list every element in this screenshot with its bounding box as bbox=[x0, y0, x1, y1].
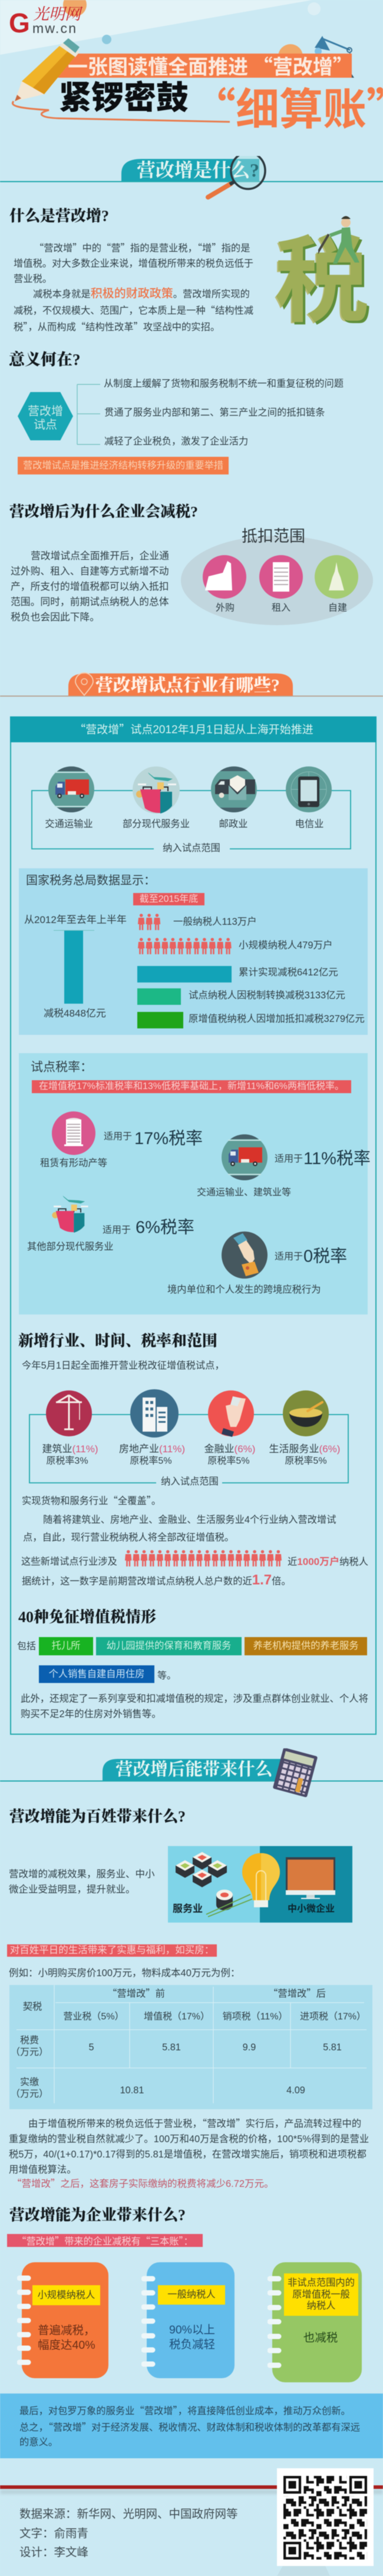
data heading: 国家税务总局数据显示： bbox=[26, 874, 156, 887]
involves label: 这些新增试点行业涉及 bbox=[21, 1556, 117, 1567]
panel header text: “营改增”试点2012年1月1日起从上海开始推进 bbox=[74, 721, 313, 737]
paragraph 1: “营改增”中的“营”指的是营业税，“增”指的是 bbox=[34, 240, 250, 254]
label: telecom: 电信业 bbox=[295, 819, 323, 829]
result: 税负减轻 bbox=[169, 2338, 215, 2351]
icon: big tax character: 税 bbox=[275, 228, 369, 334]
credits bbox=[19, 2505, 238, 2562]
industry frame and icons bbox=[31, 766, 352, 850]
original rate 4: 原税率5% bbox=[285, 1456, 327, 1466]
heading: 40种免征增值税情形 bbox=[18, 1608, 156, 1625]
paragraph 2 bbox=[14, 287, 253, 333]
label: 小规模纳税人 bbox=[38, 2290, 95, 2301]
row tax fee bbox=[11, 2035, 48, 2059]
table: tax comparison bbox=[9, 1985, 372, 2109]
credits: 设计：李文峰 bbox=[19, 2546, 88, 2559]
result bbox=[169, 2323, 215, 2352]
caption 17: 租赁有形动产等 bbox=[40, 1158, 107, 1169]
heading: 营改增后为什么企业会减税? bbox=[9, 503, 198, 520]
rate 17: 17%税率 bbox=[134, 1130, 203, 1148]
QR pattern bbox=[283, 2476, 367, 2560]
conclusion text: 的意义。 bbox=[19, 2437, 58, 2448]
tag elderly care bbox=[245, 1637, 367, 1655]
title line two black: 紧锣密鼓 bbox=[59, 79, 189, 116]
people row bbox=[124, 1549, 282, 1567]
tag self-built housing bbox=[39, 1665, 154, 1683]
explanation paragraph: 重复缴纳的营业税自然就减少了。100万和40万是含税的价格，100*5%得到的是营业 bbox=[9, 2134, 369, 2145]
bar original bbox=[137, 1012, 183, 1028]
value pilot: 试点纳税人因税制转换减税3133亿元 bbox=[189, 990, 345, 1001]
paragraph 1: 增值税。对大多数企业来说，增值税所带来的税负远低于 bbox=[14, 258, 253, 269]
hexagon: pilot bbox=[18, 392, 73, 440]
column group before: “营增改”前 bbox=[107, 1986, 165, 2000]
applies to: 适用于 bbox=[103, 1225, 131, 1235]
pill and divider bbox=[0, 1758, 383, 1782]
chart: deduction scope bbox=[181, 536, 373, 625]
heading: 营改增能为百姓带来什么? bbox=[9, 1808, 186, 1825]
original rate 1: 原税率3% bbox=[46, 1456, 88, 1466]
illustration: services and small business bbox=[168, 1846, 352, 1923]
value 5: 5 bbox=[88, 2042, 94, 2053]
label: self build: 自建 bbox=[328, 603, 347, 613]
icon: calculator bbox=[268, 1748, 324, 1798]
hexagon label: 试点 bbox=[34, 419, 57, 431]
block: benefits for people bbox=[0, 1804, 383, 1958]
title line one: 一张图读懂全面推进 “营改增” bbox=[68, 51, 353, 80]
icon: truck bbox=[222, 1134, 268, 1181]
row tax fee: 税费 bbox=[20, 2036, 39, 2046]
column input tax: 进项税（17%） bbox=[300, 2011, 366, 2021]
note bbox=[21, 1693, 368, 1719]
note: 购买不足2年的住房对外销售等。 bbox=[21, 1709, 161, 1719]
conclusion text: 总之，“营改增”对于经济发展、税收情况、财政体制和税收体制的改革都有深远 bbox=[19, 2419, 360, 2434]
value original: 原增值税纳税人因增加抵扣减税3279亿元 bbox=[189, 1014, 365, 1024]
label real estate: 房地产业(11%) bbox=[119, 1443, 185, 1455]
column VAT: 增值税（17%） bbox=[144, 2011, 210, 2021]
paragraph 1 bbox=[14, 240, 253, 284]
column output tax: 销项税（11%） bbox=[223, 2011, 288, 2021]
label bbox=[32, 2285, 100, 2305]
row actual paid: （万元） bbox=[11, 2089, 48, 2099]
callout: 对百姓平日的生活带来了实惠与福利，如买房： bbox=[10, 1945, 214, 1956]
rate 0: 0税率 bbox=[303, 1247, 347, 1266]
result: 也减税 bbox=[303, 2331, 338, 2344]
block: why taxes fall bbox=[9, 503, 373, 625]
notebook body and rings bbox=[141, 2262, 235, 2378]
callout: “营改增”带来的企业减税有“三本账”： bbox=[16, 2233, 193, 2248]
rate 11: 11%税率 bbox=[303, 1150, 371, 1169]
icon: luggage bbox=[52, 1196, 88, 1233]
label services: 服务业 bbox=[173, 1903, 203, 1914]
label bbox=[158, 2285, 225, 2305]
block: significance bbox=[9, 350, 344, 475]
label: purchase: 外购 bbox=[216, 603, 235, 613]
period label: 从2012年至去年上半年 bbox=[24, 914, 127, 925]
paragraph: 产，所支付的增值税都可以纳入抵扣 bbox=[11, 581, 169, 592]
vertical bar bbox=[53, 930, 94, 1004]
logo: domain: mw.cn bbox=[32, 21, 77, 36]
frame caption: 纳入试点范围 bbox=[161, 1476, 219, 1487]
notebook: small taxpayers bbox=[17, 2262, 108, 2378]
paragraph 2: 减税，不仅规模大、范围广，它本质上是一种“结构性减 bbox=[14, 303, 253, 317]
value 5.81: 5.81 bbox=[162, 2042, 181, 2053]
conclusion text: 最后，对包罗万象的服务业“营改增”，将直接降低创业成本，推动万众创新。 bbox=[19, 2403, 351, 2417]
heading: 营改增能为企业带来什么? bbox=[9, 2206, 186, 2223]
footer divider bbox=[0, 2485, 383, 2489]
coverage paragraph line 1: 随着将建筑业、房地产业、金融业、生活服务业4个行业纳入营改增试 bbox=[43, 1515, 336, 1525]
benefit 1: 从制度上缓解了货物和服务税制不统一和重复征税的问题 bbox=[104, 379, 344, 389]
panel header bbox=[10, 716, 377, 742]
paragraph: 微企业受益明显，提升就业。 bbox=[9, 1884, 136, 1895]
logo: site name: 光明网 bbox=[33, 5, 81, 23]
cell: deed tax: 契税 bbox=[23, 2001, 42, 2012]
explanation paragraph: 税5万，40/(1+0.17)*0.17得到的5.81是增值税，在营改增实施后，销项税和进项税都 bbox=[9, 2149, 367, 2160]
notebook body and rings bbox=[17, 2262, 108, 2378]
header: title banner and logo bbox=[9, 0, 383, 138]
hexagon label: 营改增 bbox=[28, 405, 63, 418]
result: 90%以上 bbox=[169, 2323, 215, 2336]
pilot industries row bbox=[31, 766, 352, 854]
paragraph 1: 营业税。 bbox=[14, 274, 52, 284]
block: what is yingaizeng bbox=[9, 207, 370, 334]
original rate 3: 原税率5% bbox=[207, 1456, 250, 1466]
paragraph: 营改增的减税效果，服务业、中小 bbox=[9, 1869, 154, 1880]
paragraph bbox=[11, 550, 169, 623]
credits: 数据来源：新华网、光明网、中国政府网等 bbox=[19, 2508, 238, 2521]
panel: tax administration data bbox=[19, 868, 368, 1035]
label bbox=[284, 2273, 358, 2316]
original rate 2: 原税率5% bbox=[130, 1456, 172, 1466]
notebook body and rings bbox=[268, 2262, 362, 2382]
result note: “营增改”之后，这套房子实际缴纳的税费将减少6.72万元。 bbox=[12, 2176, 274, 2190]
notebook: non-pilot VAT payers bbox=[268, 2262, 362, 2382]
paragraph: 范围。同时，前期试点纳税人的总体 bbox=[11, 596, 169, 608]
heading text: 营改增后能带来什么 bbox=[115, 1760, 272, 1779]
rates strip: 在增值税17%标准税率和13%低税率基础上，新增11%和6%两档低税率。 bbox=[39, 1081, 344, 1091]
row actual paid bbox=[11, 2077, 48, 2100]
tree connector bbox=[77, 384, 100, 445]
callout bbox=[18, 457, 229, 474]
paragraph: 过外购、租入、自建等方式新增不动 bbox=[11, 566, 169, 577]
paragraph 2: 减税本身就是积极的财政政策。营改增所实现的 bbox=[33, 287, 250, 300]
value total: 累计实现减税6412亿元 bbox=[239, 967, 338, 978]
caption 6: 其他部分现代服务业 bbox=[27, 1241, 114, 1252]
label: 一般纳税人 bbox=[167, 2289, 216, 2300]
people row 2 bbox=[137, 937, 232, 955]
section heading text: 营改增是什么? bbox=[137, 160, 259, 181]
explanation paragraph bbox=[9, 2115, 369, 2177]
label: rent: 租入 bbox=[272, 603, 290, 613]
benefit 3: 减轻了企业税负，激发了企业活力 bbox=[104, 436, 248, 447]
label: 原增值税一般 bbox=[292, 2289, 350, 2299]
tag kindergarten: 幼儿园提供的保育和教育服务 bbox=[107, 1641, 231, 1651]
label finance: 金融业(6%) bbox=[204, 1443, 255, 1455]
logo: G mark: G bbox=[9, 8, 30, 38]
icon: man with mower bbox=[318, 215, 359, 264]
block: benefits for enterprises bbox=[0, 2205, 383, 2384]
tag nursery: 托儿所 bbox=[52, 1641, 80, 1651]
explanation paragraph: 用增值税算法。 bbox=[9, 2165, 77, 2175]
table grid bbox=[9, 1985, 372, 2109]
conclusion text bbox=[19, 2403, 360, 2450]
heading text: 营改增试点行业有哪些? bbox=[95, 676, 280, 695]
header artwork: circles, lamp, banner, pencil bbox=[11, 0, 355, 124]
panel: pilot programme bbox=[10, 716, 377, 1735]
icon: building bbox=[51, 1111, 96, 1156]
date tag: 截至2015年底 bbox=[140, 894, 198, 904]
caption 11: 交通运输业、建筑业等 bbox=[197, 1187, 291, 1197]
value 4.09: 4.09 bbox=[286, 2085, 305, 2096]
benefit 2: 贯通了服务业内部和第二、第三产业之间的抵扣链条 bbox=[104, 407, 325, 418]
row tax fee: （万元） bbox=[11, 2047, 48, 2057]
tag kindergarten bbox=[96, 1637, 242, 1655]
result: 幅度达40% bbox=[38, 2339, 95, 2352]
label: modern services: 部分现代服务业 bbox=[123, 819, 190, 829]
label: transport: 交通运输业 bbox=[45, 819, 93, 829]
caption 0: 境内单位和个人发生的跨境应税行为 bbox=[167, 1284, 321, 1295]
rate 6: 6%税率 bbox=[136, 1219, 194, 1237]
bar total bbox=[137, 966, 232, 982]
value 9.9: 9.9 bbox=[243, 2042, 256, 2053]
example intro: 例如：小明购买房价100万元，物料成本40万元为例： bbox=[9, 1968, 240, 1979]
label construction: 建筑业(11%) bbox=[42, 1443, 98, 1455]
icon: hand and card bbox=[221, 1231, 268, 1279]
note: 此外，还规定了一系列享受和扣减增值税的规定，涉及重点群体创业就业、个人将 bbox=[21, 1694, 368, 1704]
ratio line: 据统计，这一数字是前期营改增试点纳税人总户数的近1.7倍。 bbox=[22, 1572, 291, 1588]
paragraph: 营改增试点全面推开后，企业通 bbox=[31, 550, 169, 562]
value 5.81: 5.81 bbox=[323, 2042, 342, 2053]
section heading: pilot industries bbox=[0, 672, 383, 697]
label: 非试点范围内的 bbox=[288, 2278, 355, 2288]
new industries frame and icons bbox=[28, 1389, 349, 1484]
label: postal: 邮政业 bbox=[219, 819, 247, 829]
label small business: 中小微企业 bbox=[288, 1904, 335, 1914]
column business tax: 营业税（5%） bbox=[63, 2011, 124, 2021]
paragraph 2: 税”，从而构成“结构性改革”攻坚战中的实招。 bbox=[14, 319, 220, 333]
label: 纳税人 bbox=[307, 2301, 335, 2311]
callout: 营改增试点是推进经济结构转移升级的重要举措 bbox=[23, 460, 223, 471]
result bbox=[38, 2323, 95, 2353]
hexagon label bbox=[28, 404, 63, 431]
applies to: 适用于 bbox=[275, 1252, 303, 1262]
coverage line: 实现货物和服务行业“全覆盖”。 bbox=[22, 1493, 161, 1507]
conclusion band bbox=[0, 2394, 383, 2458]
bar value: 减税4848亿元 bbox=[44, 1008, 106, 1019]
explanation paragraph: 由于增值税所带来的税负远低于营业税，“营改增”实行后，产品流转过程中的 bbox=[28, 2116, 361, 2130]
paragraph bbox=[9, 1867, 154, 1897]
applies to: 适用于 bbox=[104, 1131, 132, 1141]
notebook: general taxpayers bbox=[141, 2262, 235, 2378]
panel: pilot tax rates bbox=[19, 1053, 368, 1314]
includes: 包括 bbox=[17, 1641, 36, 1651]
value 1: 一般纳税人113万户 bbox=[173, 917, 257, 927]
block: exemptions bbox=[17, 1608, 368, 1719]
column group after: “营增改”后 bbox=[268, 1986, 326, 2000]
applies to: 适用于 bbox=[275, 1154, 303, 1164]
bar pilot bbox=[137, 988, 181, 1005]
tag nursery bbox=[39, 1637, 93, 1655]
etc: 等。 bbox=[157, 1671, 176, 1681]
heading: 什么是营改增? bbox=[9, 207, 109, 224]
section heading: what is it bbox=[0, 155, 383, 200]
date tag bbox=[133, 893, 204, 905]
people row 1 bbox=[137, 914, 161, 931]
heading: 意义何在? bbox=[9, 351, 80, 369]
result: 普遍减税， bbox=[38, 2324, 95, 2337]
value 10.81: 10.81 bbox=[120, 2085, 144, 2096]
value 2: 小规模纳税人479万户 bbox=[239, 940, 333, 951]
tag self-built housing: 个人销售自建自用住房 bbox=[49, 1669, 144, 1679]
QR code bbox=[277, 2468, 374, 2566]
label lifestyle services: 生活服务业(6%) bbox=[269, 1443, 340, 1455]
row actual paid: 实缴 bbox=[20, 2077, 39, 2087]
frame caption: 纳入试点范围 bbox=[163, 843, 220, 854]
coverage paragraph line 2: 点，自此，现行营业税纳税人将全部改征增值税。 bbox=[23, 1532, 234, 1543]
block: new industries bbox=[18, 1332, 368, 1588]
pill and divider bbox=[0, 672, 383, 697]
heading: 新增行业、时间、税率和范围 bbox=[18, 1332, 217, 1349]
chart title: 抵扣范围 bbox=[242, 527, 305, 545]
section heading: what it brings bbox=[0, 1748, 383, 1798]
pill, divider and magnifier bbox=[0, 155, 383, 200]
paragraph: 税负也会因此下降。 bbox=[11, 612, 100, 623]
rates heading: 试点税率： bbox=[31, 1060, 93, 1074]
tag elderly care: 养老机构提供的养老服务 bbox=[253, 1641, 359, 1651]
credits: 文字：俞雨青 bbox=[19, 2527, 88, 2540]
taxpayers count: 近1000万户纳税人 bbox=[288, 1556, 368, 1568]
intro: 今年5月1日起全面推开营业税改征增值税试点， bbox=[22, 1360, 224, 1371]
